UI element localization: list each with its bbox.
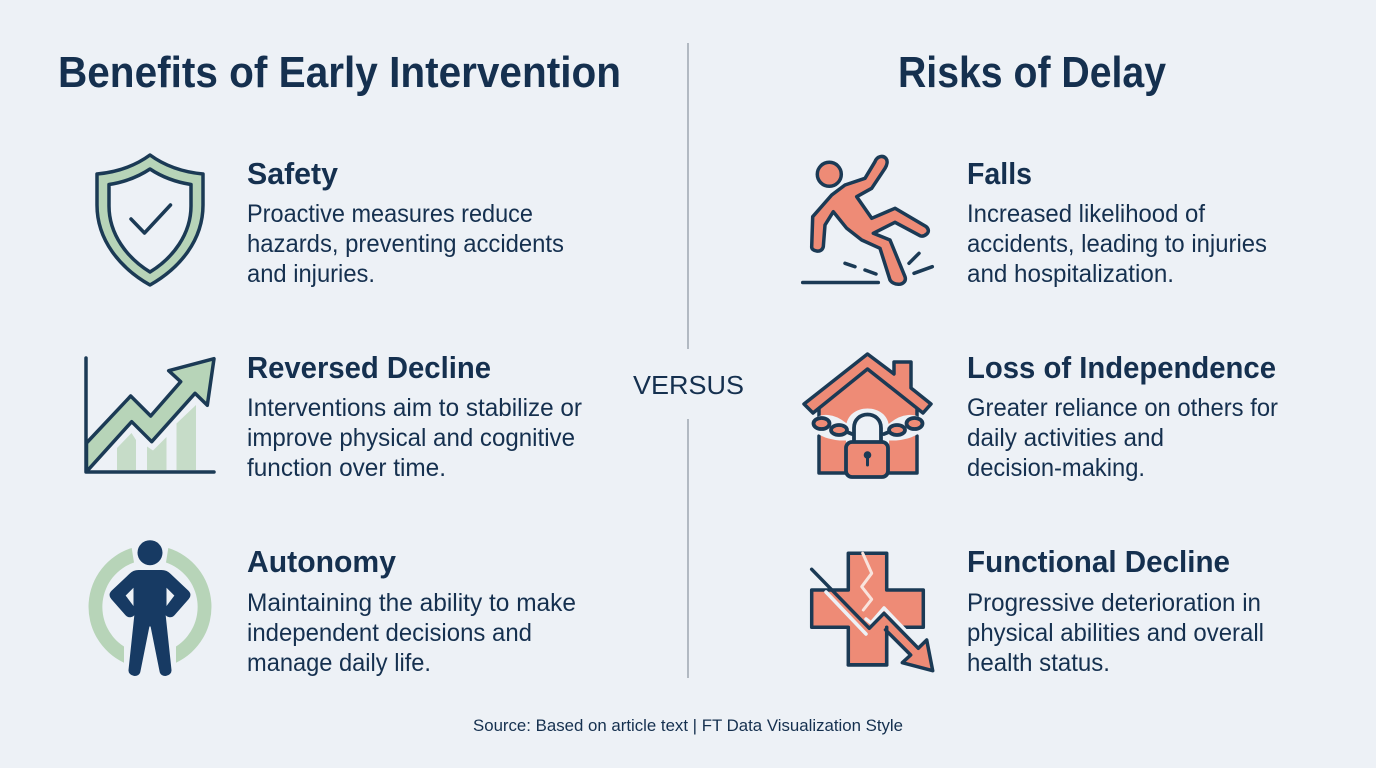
icon: person with ring	[89, 540, 211, 675]
title: benefits column: Benefits of Early Intervention	[58, 48, 621, 97]
divider: centre versus: VERSUS	[633, 370, 744, 400]
panel: safety	[97, 155, 564, 288]
text: autonomy description: manage daily life.	[247, 649, 431, 677]
title: risks column: Risks of Delay	[898, 48, 1166, 97]
icon: cracked cross with falling arrow	[812, 553, 933, 671]
text: reversed decline description	[247, 394, 582, 482]
heading: reversed decline: Reversed Decline	[247, 350, 491, 385]
text: safety description: hazards, preventing accidents	[247, 230, 564, 258]
icon: falling person	[803, 156, 932, 284]
source note: Source: Based on article text | FT Data Visualization Style	[473, 716, 903, 735]
panel: falls	[803, 156, 1267, 288]
heading: autonomy: Autonomy	[247, 544, 397, 579]
text: safety description: Proactive measures reduce	[247, 200, 533, 228]
panel: reversed decline	[86, 350, 582, 482]
text: autonomy description: Maintaining the ability to make	[247, 589, 576, 617]
text: reversed decline description: Interventions aim to stabilize or	[247, 394, 582, 422]
text: loss of independence description: decision-making.	[967, 454, 1145, 482]
panel: autonomy	[89, 540, 576, 677]
heading: functional decline: Functional Decline	[967, 544, 1230, 579]
text: functional decline description: physical abilities and overall	[967, 619, 1264, 647]
heading: falls: Falls	[967, 156, 1032, 191]
text: functional decline description: health status.	[967, 649, 1110, 677]
panel: functional decline	[812, 544, 1264, 677]
text: falls description	[967, 200, 1267, 288]
text: reversed decline description: improve physical and cognitive	[247, 424, 575, 452]
text: functional decline description: Progressive deterioration in	[967, 589, 1261, 617]
text: autonomy description: independent decisions and	[247, 619, 532, 647]
text: safety description	[247, 200, 564, 288]
icon: shield with check	[97, 155, 203, 285]
text: reversed decline description: function over time.	[247, 454, 446, 482]
text: loss of independence description	[967, 394, 1278, 482]
text: loss of independence description: daily activities and	[967, 424, 1164, 452]
heading: loss of independence: Loss of Independence	[967, 350, 1276, 385]
text: falls description: Increased likelihood of	[967, 200, 1205, 228]
text: safety description: and injuries.	[247, 260, 375, 288]
text: functional decline description	[967, 589, 1264, 677]
text: falls description: accidents, leading to injuries	[967, 230, 1267, 258]
icon: locked house	[804, 354, 931, 477]
heading: safety: Safety	[247, 156, 339, 191]
text: falls description: and hospitalization.	[967, 260, 1174, 288]
panel: loss of independence	[804, 350, 1278, 482]
icon: rising chart arrow	[86, 358, 214, 472]
text: autonomy description	[247, 589, 576, 677]
text: loss of independence description: Greater reliance on others for	[967, 394, 1278, 422]
